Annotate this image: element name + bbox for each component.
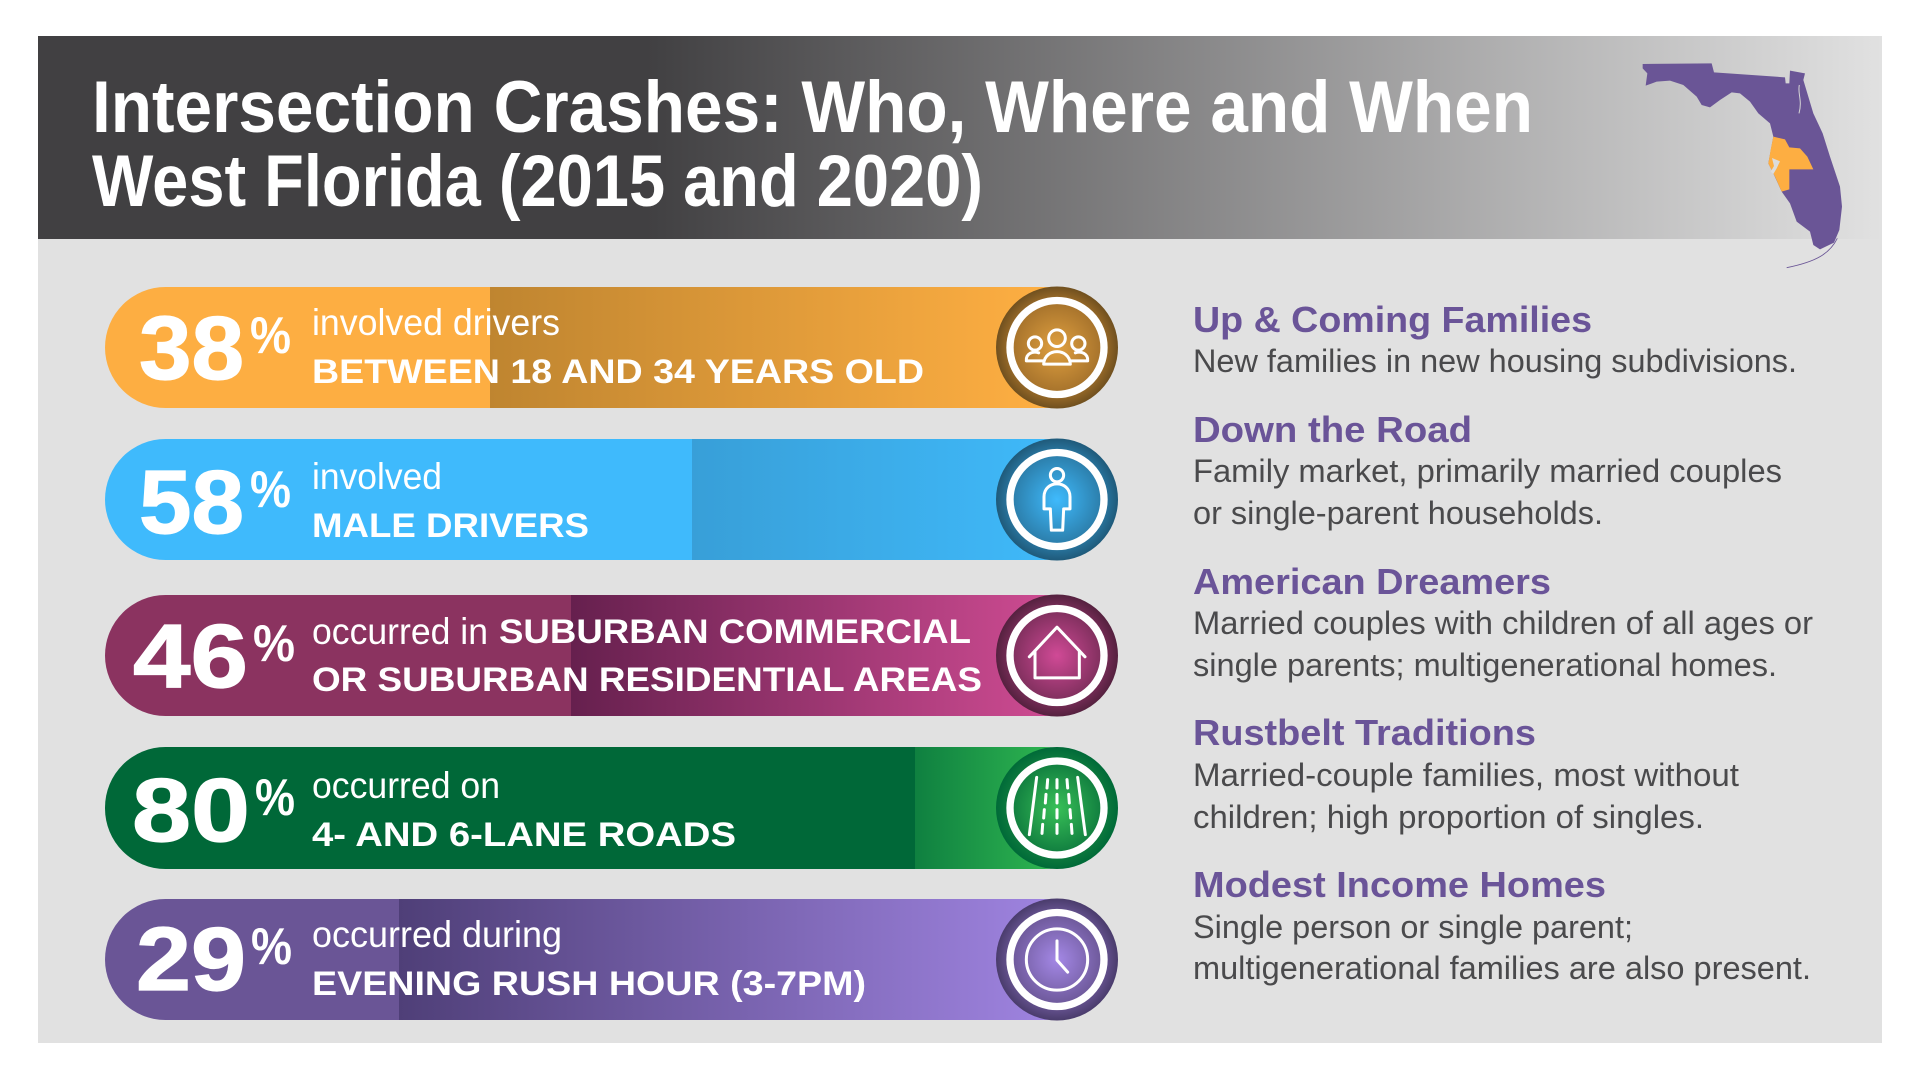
label: rush hour (312, 914, 866, 1003)
label: drivers age: involved drivers (312, 302, 560, 343)
icon: person (996, 439, 1118, 560)
label: male drivers: involved (312, 456, 442, 497)
text block: American Dreamers: Married couples with children of all ages or (1193, 605, 1813, 641)
stat: 29% (136, 910, 292, 1010)
bar: 29% evening rush hour (105, 899, 1118, 1020)
label: lane roads: occurred on (312, 765, 500, 806)
stat: 46%: % (253, 615, 295, 673)
bar: 80% 4- and 6-lane roads (105, 747, 1118, 869)
text block: Modest Income Homes: multigenerational families are also present. (1193, 950, 1811, 986)
stat: 29%: % (251, 918, 292, 976)
text block: Down the Road: or single-parent households. (1193, 495, 1603, 531)
stat: 38%: % (250, 307, 291, 365)
stat: 46%: 46 (133, 607, 248, 707)
map: Florida with highlighted West Florida counties (1643, 63, 1842, 268)
text block: Up & Coming Families (1193, 299, 1797, 379)
stat: 29%: 29 (136, 910, 246, 1010)
stat: 46% (133, 607, 295, 707)
text block: Rustbelt Traditions: children; high proportion of singles. (1193, 799, 1704, 835)
label: male drivers: MALE DRIVERS (312, 507, 589, 545)
text block: Up & Coming Families: Up & Coming Families (1193, 299, 1592, 340)
label: drivers age (312, 302, 924, 391)
title (92, 67, 1533, 222)
text block: Rustbelt Traditions (1193, 712, 1739, 835)
label: suburban areas: SUBURBAN COMMERCIAL (499, 613, 971, 651)
text block: Modest Income Homes (1193, 864, 1811, 986)
stat: 58%: 58 (139, 453, 244, 553)
text block: Rustbelt Traditions: Married-couple families, most without (1193, 757, 1739, 793)
label: male drivers (312, 456, 589, 545)
text block: Up & Coming Families: New families in new housing subdivisions. (1193, 343, 1797, 379)
text block: American Dreamers: single parents; multigenerational homes. (1193, 647, 1777, 683)
label: suburban areas (312, 611, 982, 699)
title: West Florida (2015 and 2020) (92, 141, 983, 222)
header banner (38, 36, 1882, 239)
icon: house (996, 595, 1118, 716)
stat: 58%: % (250, 461, 291, 519)
label: rush hour: occurred during (312, 914, 562, 955)
stat: 80%: % (255, 769, 295, 827)
stat: 38% (139, 299, 291, 399)
stat: 80%: 80 (132, 761, 250, 861)
text block: Modest Income Homes: Single person or single parent; (1193, 909, 1633, 945)
title: Intersection Crashes: Who, Where and When (92, 67, 1533, 148)
label: lane roads (312, 765, 736, 854)
stat: 80% (132, 761, 295, 861)
icon: road (996, 747, 1118, 869)
label: suburban areas: OR SUBURBAN RESIDENTIAL AREAS (312, 661, 982, 699)
text block: Modest Income Homes: Modest Income Homes (1193, 864, 1606, 905)
text block: Rustbelt Traditions: Rustbelt Traditions (1193, 712, 1536, 753)
text block: American Dreamers (1193, 561, 1813, 683)
label: suburban areas: occurred in (312, 611, 488, 652)
text block: Down the Road: Down the Road (1193, 409, 1472, 450)
text block: Down the Road: Family market, primarily married couples (1193, 453, 1782, 489)
text block: American Dreamers: American Dreamers (1193, 561, 1551, 602)
label: lane roads: 4- AND 6-LANE ROADS (312, 816, 736, 854)
text block: Down the Road (1193, 409, 1782, 531)
bar: 46% suburban areas (105, 595, 1118, 716)
stat: 38%: 38 (139, 299, 244, 399)
stat: 58% (139, 453, 291, 553)
label: drivers age: BETWEEN 18 AND 34 YEARS OLD (312, 353, 924, 391)
label: rush hour: EVENING RUSH HOUR (3-7PM) (312, 965, 866, 1003)
bar: 58% male drivers (105, 439, 1118, 560)
icon: clock (996, 899, 1118, 1020)
icon: group of people (996, 287, 1118, 408)
bar: 38% drivers 18 to 34 (105, 287, 1118, 408)
